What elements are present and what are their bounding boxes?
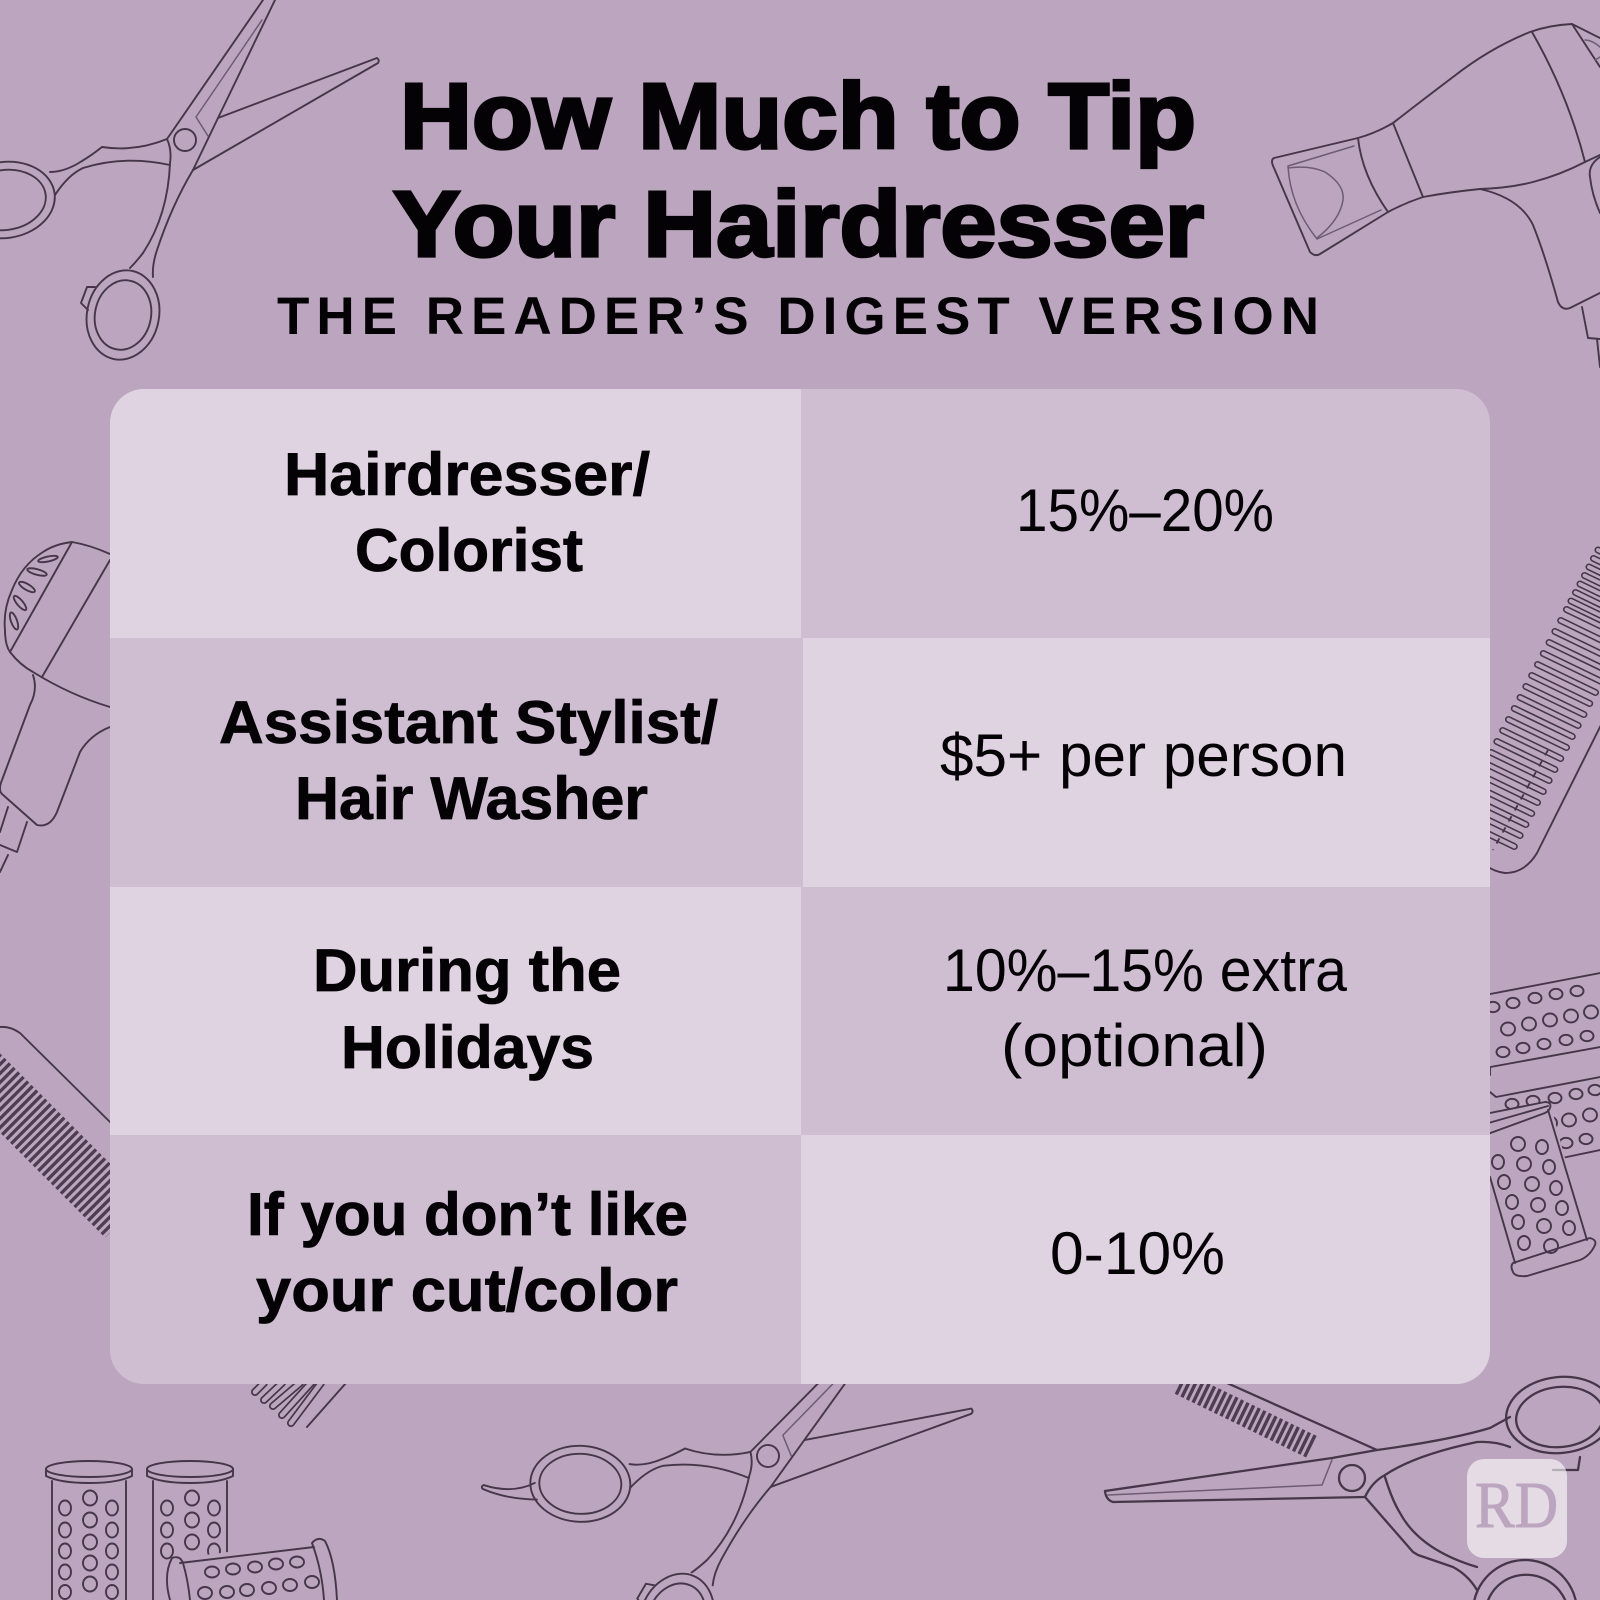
- row 2: assistant stylist / hair washer: $5+ per person: [940, 722, 1347, 789]
- row 3: during the holidays: 10%–15% extra: [943, 937, 1348, 1004]
- row 1: hairdresser / colorist: 15%–20%: [1016, 477, 1274, 544]
- row 4: if you don't like your cut/color: 0-10%: [1050, 1220, 1225, 1287]
- subtitle: THE READER’S DIGEST VERSION: [277, 287, 1319, 346]
- icon: comb under panel: [255, 1383, 346, 1427]
- icon: hair rollers right: [1485, 973, 1600, 1276]
- title: [393, 64, 1204, 276]
- icon: scissors top left: [0, 0, 379, 367]
- icon: hair rollers bottom left: [46, 1461, 340, 1600]
- row 3: during the holidays: Holidays: [341, 1014, 594, 1081]
- row 4: if you don't like your cut/color: [110, 1135, 1490, 1384]
- row 2: assistant stylist / hair washer: [110, 638, 1490, 887]
- icon: thinning scissors bottom right: [1105, 1372, 1600, 1600]
- icon: hair dryer top right: [1272, 24, 1600, 367]
- row 4: if you don't like your cut/color: If you don’t like: [247, 1181, 688, 1248]
- icon: hair dryer left: [0, 542, 110, 872]
- row 1: hairdresser / colorist: Hairdresser/: [284, 441, 650, 508]
- row 3: during the holidays: During the: [313, 937, 621, 1004]
- icon: comb left: [0, 1027, 125, 1218]
- row 2: assistant stylist / hair washer: Hair Washer: [295, 765, 648, 832]
- logo: RD badge: RD: [1475, 1469, 1558, 1542]
- row 1: hairdresser / colorist: Colorist: [355, 517, 583, 584]
- row 2: assistant stylist / hair washer: Assistant Stylist/: [219, 689, 718, 756]
- row 4: if you don't like your cut/color: your cut/color: [256, 1257, 678, 1324]
- icon: scissors bottom centre: [456, 1270, 983, 1600]
- logo: RD badge: [1467, 1459, 1567, 1558]
- title: How Much to Tip: [400, 64, 1196, 168]
- title: Your Hairdresser: [393, 172, 1204, 276]
- icon: comb right: [1456, 550, 1600, 873]
- row 3: during the holidays: (optional): [1001, 1012, 1268, 1079]
- row 1: hairdresser / colorist: [110, 389, 1490, 638]
- panel: tipping table: [110, 389, 1490, 1384]
- row 3: during the holidays: [110, 887, 1490, 1135]
